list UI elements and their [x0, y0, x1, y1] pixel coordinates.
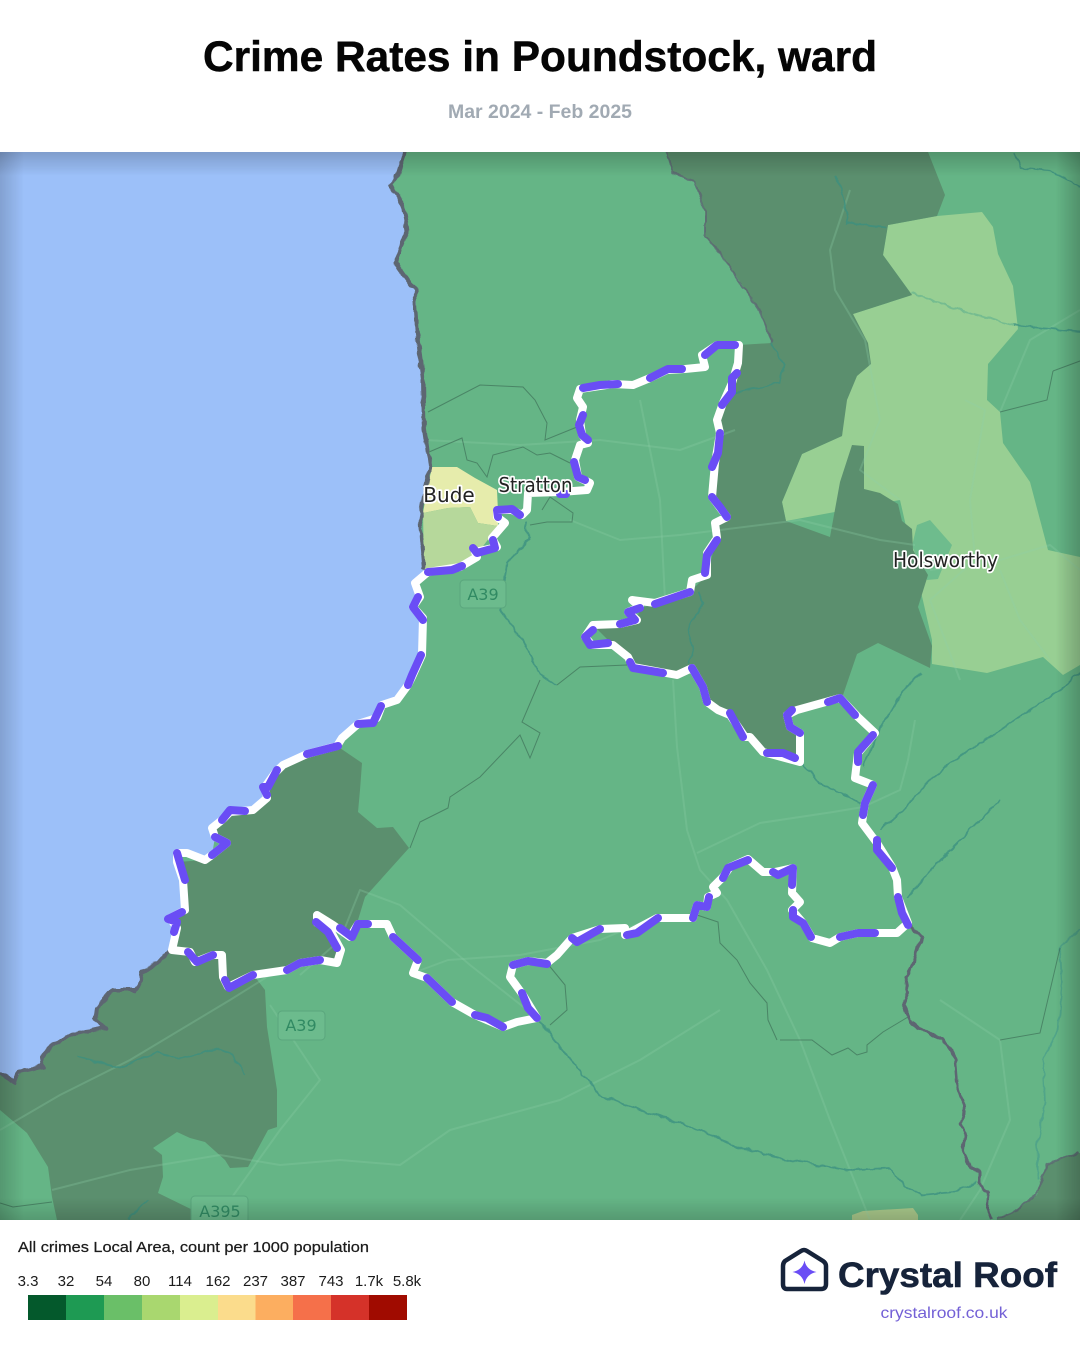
sea — [0, 152, 430, 1082]
title: Crime Rates in Poundstock, ward — [203, 33, 877, 81]
map edge vignette — [0, 152, 1080, 1220]
road badge: A395: A395 — [199, 1202, 241, 1221]
ward outline: white casing — [170, 345, 908, 1027]
legend values: 743 — [318, 1273, 344, 1290]
place label: Bude: Bude — [423, 483, 475, 507]
region: dark green south-west — [0, 950, 277, 1220]
icon: crystal star — [792, 1260, 816, 1284]
legend values: 237 — [243, 1273, 268, 1290]
legend values: 1.7k — [355, 1273, 384, 1290]
legend values: 3.3 — [18, 1273, 38, 1290]
region: pale green south patch — [852, 1208, 918, 1220]
region: Holsworthy light green — [782, 212, 1080, 675]
ward outline: purple dashes — [168, 345, 908, 1027]
poundstock ward outline — [168, 345, 908, 1027]
place label: Stratton: Stratton — [498, 473, 572, 497]
road network — [0, 190, 1080, 1220]
road badge: A395 — [190, 1196, 248, 1220]
legend values: 32 — [58, 1273, 74, 1290]
legend colour scale — [28, 1295, 407, 1320]
land base — [0, 152, 1080, 1220]
place label: Holsworthy: Holsworthy — [893, 548, 998, 572]
legend values: 162 — [205, 1273, 231, 1290]
road badge: A39 south — [278, 1011, 325, 1040]
region: south Bude light green — [423, 507, 498, 572]
road badge: A39 north — [460, 580, 506, 608]
road badge: A39 north: A39 — [467, 585, 499, 604]
legend values: 387 — [280, 1273, 306, 1290]
legend title: All crimes Local Area, count per 1000 population — [18, 1239, 369, 1256]
legend values: 114 — [168, 1273, 192, 1290]
legend values: 80 — [134, 1273, 150, 1290]
coastline and county border — [0, 152, 1080, 1220]
legend values — [18, 1273, 422, 1290]
icon: house outline — [783, 1250, 826, 1289]
logo: Crystal Roof — [783, 1250, 1057, 1322]
region: dark green south-east corner — [997, 1153, 1080, 1220]
region: dark green north-east — [593, 152, 945, 762]
logo wordmark: Crystal Roof — [838, 1256, 1057, 1295]
rivers — [77, 154, 1080, 1218]
region: Holsworthy town — [912, 520, 952, 580]
subtitle: date range: Mar 2024 - Feb 2025 — [448, 102, 632, 123]
legend values: 54 — [96, 1273, 112, 1290]
region: Bude pale yellow — [423, 467, 498, 526]
ward boundary thin lines — [0, 361, 1080, 1207]
road badge: A39 south: A39 — [285, 1016, 317, 1035]
choropleth map — [0, 152, 1080, 1226]
legend values: 5.8k — [393, 1273, 422, 1290]
legend — [18, 1239, 422, 1320]
region: dark green west coast — [170, 746, 409, 987]
website link: crystalroof.co.uk — [880, 1305, 1009, 1322]
